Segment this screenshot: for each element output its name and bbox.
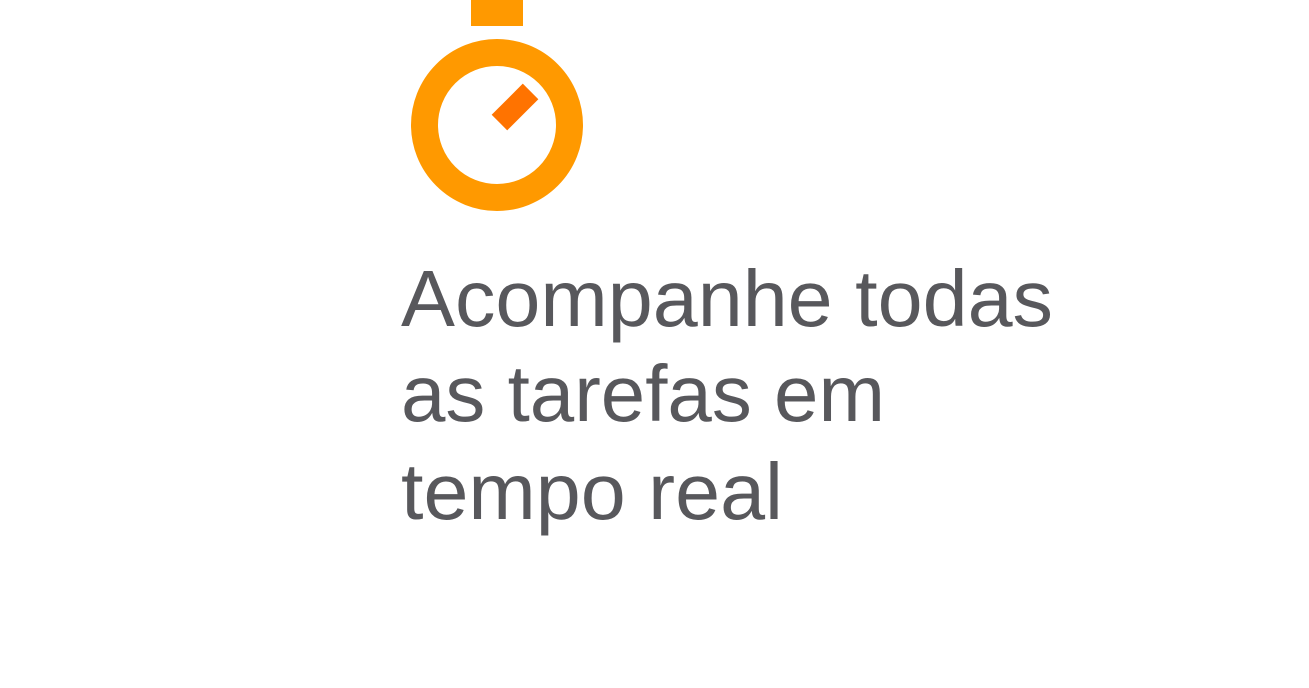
heading text: tempo real: [401, 447, 783, 536]
icon: stopwatch: [424, 0, 570, 198]
heading text: as tarefas em: [401, 349, 885, 438]
heading text: [401, 254, 1053, 536]
heading text: Acompanhe todas: [401, 254, 1053, 343]
